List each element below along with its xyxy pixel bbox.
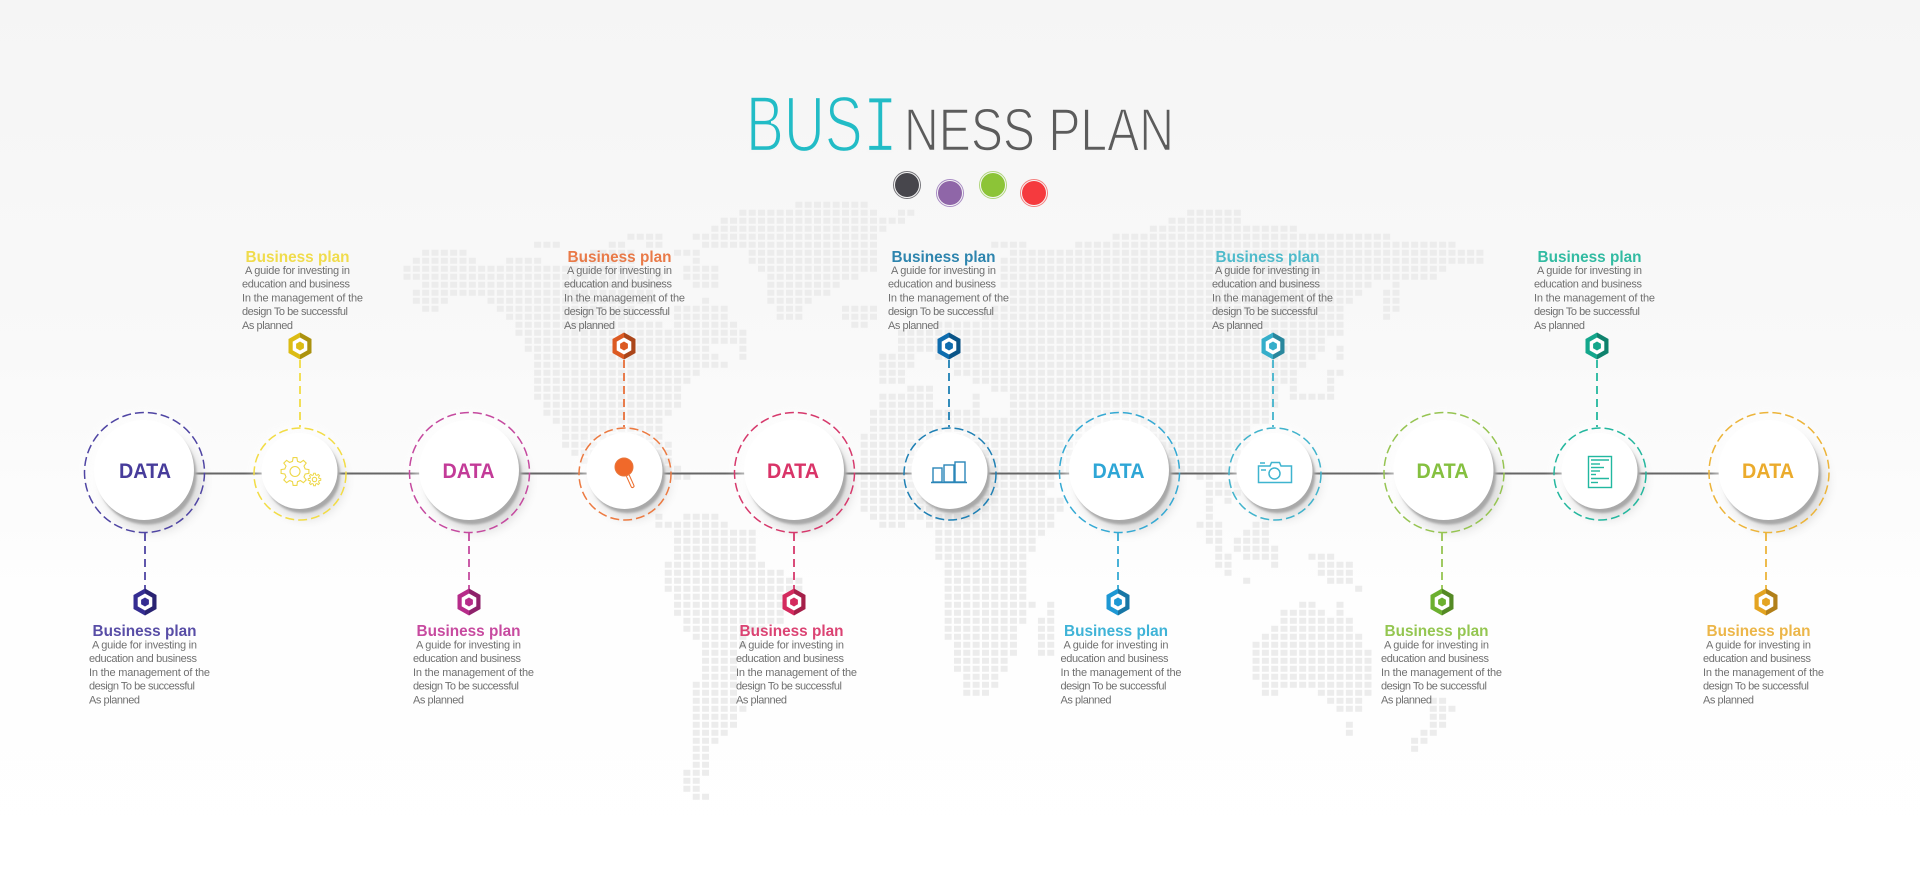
description: design To be successful bbox=[413, 681, 519, 693]
description: In the management of the bbox=[888, 292, 1009, 304]
icon: gears bbox=[281, 458, 321, 486]
description bbox=[1381, 640, 1502, 706]
hexagon marker bbox=[612, 332, 636, 360]
timeline line bbox=[145, 472, 1769, 474]
circle bbox=[579, 427, 671, 520]
hexagon marker bbox=[1262, 332, 1284, 360]
connector bbox=[1765, 533, 1767, 589]
description: education and business bbox=[1703, 653, 1812, 665]
description: In the management of the bbox=[736, 667, 857, 679]
hexagon marker bbox=[288, 332, 312, 360]
description bbox=[1212, 265, 1333, 332]
circle bbox=[410, 412, 530, 532]
heading: Business plan bbox=[568, 249, 672, 266]
description: education and business bbox=[736, 653, 844, 665]
data label: DATA bbox=[442, 460, 494, 483]
circle bbox=[84, 412, 204, 532]
description: education and business bbox=[242, 279, 350, 291]
description: In the management of the bbox=[242, 292, 363, 304]
description: education and business bbox=[1534, 279, 1642, 291]
data label: DATA bbox=[1416, 460, 1468, 483]
description: education and business bbox=[1060, 653, 1169, 665]
circle bbox=[904, 427, 996, 520]
description: As planned bbox=[736, 694, 787, 706]
description: As planned bbox=[1534, 320, 1585, 332]
title bbox=[746, 79, 1174, 176]
icon: magnifier bbox=[615, 458, 633, 486]
world map dot grid bbox=[404, 205, 1483, 797]
description: As planned bbox=[888, 320, 939, 332]
description: As planned bbox=[89, 694, 140, 706]
description: design To be successful bbox=[1381, 681, 1487, 693]
hexagon marker bbox=[1586, 332, 1608, 360]
heading: Business plan bbox=[1064, 623, 1168, 640]
hexagon marker bbox=[134, 588, 156, 616]
title: NESS PLAN bbox=[904, 96, 1174, 164]
node 10: teal document bbox=[1534, 249, 1655, 520]
data label: DATA bbox=[1742, 460, 1794, 483]
heading: Business plan bbox=[1706, 623, 1810, 640]
description bbox=[888, 265, 1009, 332]
connector bbox=[144, 533, 146, 589]
description: In the management of the bbox=[89, 667, 210, 679]
node 7: sky data bbox=[1060, 412, 1182, 706]
description: In the management of the bbox=[1381, 667, 1502, 679]
description bbox=[1534, 265, 1655, 332]
circle bbox=[1554, 427, 1646, 520]
heading: Business plan bbox=[92, 623, 196, 640]
description bbox=[89, 640, 210, 706]
description bbox=[1060, 640, 1182, 706]
connector bbox=[1596, 360, 1598, 427]
node 6: blue chart bbox=[888, 249, 1009, 520]
icon: document bbox=[1588, 456, 1612, 488]
description: A guide for investing in bbox=[1384, 640, 1489, 652]
hexagon marker bbox=[938, 332, 960, 360]
colour dots bbox=[894, 172, 1048, 206]
description: education and business bbox=[1381, 653, 1490, 665]
description: education and business bbox=[1212, 279, 1320, 291]
description: In the management of the bbox=[413, 667, 534, 679]
description: design To be successful bbox=[1060, 681, 1166, 693]
data label: DATA bbox=[119, 460, 171, 483]
circle bbox=[1060, 412, 1180, 532]
description: As planned bbox=[242, 320, 293, 332]
connector bbox=[468, 533, 470, 589]
connector bbox=[623, 360, 625, 427]
connector bbox=[1272, 360, 1274, 427]
hexagon marker bbox=[1430, 588, 1454, 616]
node 2: yellow gears bbox=[242, 249, 363, 520]
description: A guide for investing in bbox=[1064, 640, 1168, 652]
node 4: orange magnifier bbox=[564, 249, 685, 520]
description: As planned bbox=[1703, 694, 1754, 706]
heading: Business plan bbox=[740, 623, 844, 640]
description: design To be successful bbox=[888, 306, 994, 318]
description: education and business bbox=[413, 653, 522, 665]
title: BUSI bbox=[746, 79, 898, 176]
description: A guide for investing in bbox=[1537, 265, 1642, 277]
node 3: magenta data bbox=[410, 412, 534, 706]
circle bbox=[1709, 412, 1829, 532]
description: design To be successful bbox=[736, 681, 842, 693]
circle bbox=[254, 427, 346, 520]
hexagon marker bbox=[1754, 588, 1778, 616]
heading: Business plan bbox=[892, 249, 996, 266]
data label: DATA bbox=[767, 460, 819, 483]
heading: Business plan bbox=[1538, 249, 1642, 266]
description: education and business bbox=[89, 653, 198, 665]
description: A guide for investing in bbox=[1706, 640, 1811, 652]
heading: Business plan bbox=[246, 249, 350, 266]
description: In the management of the bbox=[1212, 292, 1333, 304]
node 8: cyan camera bbox=[1212, 249, 1333, 520]
description: design To be successful bbox=[1534, 306, 1640, 318]
description: A guide for investing in bbox=[891, 265, 996, 277]
icon: camera bbox=[1258, 462, 1292, 482]
hexagon marker bbox=[1106, 588, 1130, 616]
node 1: indigo data bbox=[84, 412, 210, 706]
heading: Business plan bbox=[1384, 623, 1488, 640]
description bbox=[242, 265, 363, 332]
description: A guide for investing in bbox=[739, 640, 844, 652]
description: In the management of the bbox=[1534, 292, 1655, 304]
description: A guide for investing in bbox=[416, 640, 521, 652]
heading: Business plan bbox=[416, 623, 520, 640]
description: As planned bbox=[413, 694, 464, 706]
description: As planned bbox=[1212, 320, 1263, 332]
description bbox=[1703, 640, 1824, 706]
description: As planned bbox=[1381, 694, 1432, 706]
description: In the management of the bbox=[1703, 667, 1824, 679]
description: education and business bbox=[564, 279, 672, 291]
description: A guide for investing in bbox=[245, 265, 350, 277]
description: design To be successful bbox=[1703, 681, 1809, 693]
connector bbox=[793, 533, 795, 589]
circle bbox=[1229, 427, 1321, 520]
description: A guide for investing in bbox=[567, 265, 672, 277]
description: As planned bbox=[564, 320, 615, 332]
description: A guide for investing in bbox=[1215, 265, 1320, 277]
hexagon marker bbox=[782, 588, 806, 616]
description: In the management of the bbox=[1060, 667, 1182, 679]
hexagon marker bbox=[458, 588, 480, 616]
description: design To be successful bbox=[89, 681, 195, 693]
data label: DATA bbox=[1092, 460, 1144, 483]
description bbox=[736, 640, 857, 706]
description: education and business bbox=[888, 279, 996, 291]
description: In the management of the bbox=[564, 292, 685, 304]
node 9: green data bbox=[1381, 412, 1504, 706]
connector bbox=[1441, 533, 1443, 589]
description: design To be successful bbox=[242, 306, 348, 318]
node 5: crimson data bbox=[734, 412, 857, 706]
description: design To be successful bbox=[1212, 306, 1318, 318]
description bbox=[413, 640, 534, 706]
connector bbox=[1117, 533, 1119, 589]
description bbox=[564, 265, 685, 332]
node 11: amber data bbox=[1703, 412, 1829, 706]
connector bbox=[299, 360, 301, 427]
description: As planned bbox=[1060, 694, 1112, 706]
connector bbox=[948, 360, 950, 427]
circle bbox=[734, 412, 854, 532]
description: A guide for investing in bbox=[92, 640, 197, 652]
description: design To be successful bbox=[564, 306, 670, 318]
icon: bar chart bbox=[931, 462, 967, 482]
heading: Business plan bbox=[1216, 249, 1320, 266]
circle bbox=[1384, 412, 1504, 532]
